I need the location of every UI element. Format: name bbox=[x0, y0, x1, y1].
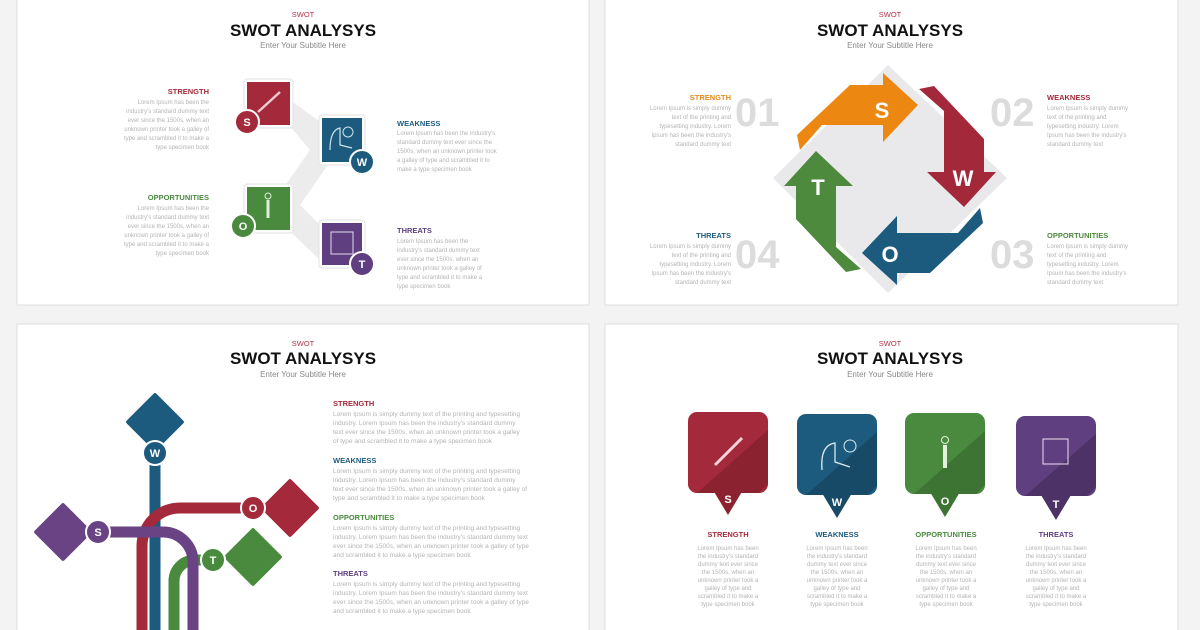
pin texts: the industry's standard bbox=[916, 554, 976, 560]
text: strength: ever since the 1500s, when an bbox=[128, 118, 209, 124]
text: strength: type and scrambled it to make a bbox=[124, 136, 210, 142]
text: strength 2: Lorem Ipsum is simply dummy bbox=[650, 106, 731, 112]
marker W: W bbox=[150, 448, 161, 460]
connector band bbox=[268, 100, 345, 260]
pin texts: Lorem Ipsum has been bbox=[806, 546, 868, 552]
text: weakness: 1500s, when an unknown printer took bbox=[397, 149, 498, 155]
text: strength: STRENGTH bbox=[168, 87, 209, 96]
pin texts: OPPORTUNITIES bbox=[915, 530, 977, 539]
text: weakness: Lorem Ipsum has been the industry's bbox=[397, 131, 495, 137]
numbers bbox=[735, 91, 1034, 277]
text list slide 3: industry. Lorem Ipsum has been the industry's standard dummy bbox=[333, 477, 516, 484]
text: threats bbox=[397, 226, 483, 290]
pin texts: galley of type and bbox=[704, 586, 752, 592]
pin T: T bbox=[1053, 499, 1060, 511]
heading slide 1 bbox=[230, 10, 376, 50]
text: opportunities: OPPORTUNITIES bbox=[148, 193, 209, 202]
text: threats 2: THREATS bbox=[696, 231, 731, 240]
pin texts: the 1500s, when an bbox=[920, 570, 972, 576]
text: threats: THREATS bbox=[397, 226, 432, 235]
text list slide 3: STRENGTH bbox=[333, 399, 374, 408]
heading slide 1: Enter Your Subtitle Here bbox=[260, 41, 346, 50]
icon box O bbox=[231, 184, 293, 238]
icon box W: W bbox=[357, 157, 368, 169]
text: opportunities 2: typesetting industry. Lorem bbox=[1047, 262, 1119, 268]
text: weakness: make a type specimen book bbox=[397, 167, 473, 173]
pin texts: THREATS bbox=[1039, 530, 1073, 539]
pin texts: scrambled it to make a bbox=[916, 594, 977, 600]
numbers: 02 bbox=[990, 91, 1034, 135]
text: opportunities: type and scrambled it to make a bbox=[124, 242, 210, 248]
pin W: W bbox=[832, 497, 843, 509]
arrow O bbox=[862, 208, 983, 285]
heading slide 3: SWOT bbox=[292, 339, 315, 348]
text list slide 3: THREATS bbox=[333, 569, 368, 578]
text: strength 2: Ipsum has been the industry's bbox=[651, 133, 731, 139]
road lines bbox=[98, 450, 253, 630]
text: weakness: WEAKNESS bbox=[397, 119, 440, 128]
heading slide 3: SWOT ANALYSYS bbox=[230, 349, 376, 368]
gray diamond bbox=[773, 65, 1007, 293]
text list slide 3: of type and scrambled it to make a type specimen book bbox=[333, 438, 493, 445]
heading slide 1: SWOT bbox=[292, 10, 315, 19]
text: opportunities: industry's standard dummy text bbox=[126, 215, 209, 221]
pin texts: the 1500s, when an bbox=[811, 570, 863, 576]
pin texts: scrambled it to make a bbox=[807, 594, 868, 600]
marker W bbox=[124, 391, 186, 465]
text: threats: Lorem Ipsum has been the bbox=[397, 239, 469, 245]
heading slide 4: SWOT bbox=[879, 339, 902, 348]
text: strength: industry's standard dummy text bbox=[126, 109, 209, 115]
text: weakness 2: WEAKNESS bbox=[1047, 93, 1090, 102]
pin texts: the 1500s, when an bbox=[702, 570, 754, 576]
marker S: S bbox=[94, 527, 102, 539]
text list slide 3: type and scrambled it to make a type specimen book bbox=[333, 495, 485, 502]
heading slide 4: Enter Your Subtitle Here bbox=[847, 370, 933, 379]
text: threats 2: typesetting industry. Lorem bbox=[659, 262, 731, 268]
text list slide 3: industry. Lorem Ipsum has been the industry's standard dummy text bbox=[333, 534, 528, 541]
text: strength: unknown printer took a galley of bbox=[124, 127, 209, 133]
text list slide 3: Lorem Ipsum is simply dummy text of the printing and typesetting bbox=[333, 468, 521, 475]
pin W bbox=[797, 414, 877, 518]
pin texts: scrambled it to make a bbox=[698, 594, 759, 600]
arrow O: O bbox=[881, 242, 899, 267]
icon box T bbox=[319, 220, 374, 276]
text: strength 2: standard dummy text bbox=[675, 142, 731, 148]
pin texts: STRENGTH bbox=[707, 530, 749, 539]
marker O: O bbox=[249, 503, 258, 515]
arrow T bbox=[784, 151, 861, 272]
pin texts: Lorem Ipsum has been bbox=[1025, 546, 1087, 552]
text: threats: industry's standard dummy text bbox=[397, 248, 480, 254]
text: opportunities 2: Ipsum has been the industry's bbox=[1047, 271, 1127, 277]
pin texts: unknown printer took a bbox=[807, 578, 868, 584]
text list slide 3: text ever since the 1500s, when an unknown printer took a galley of bbox=[333, 486, 527, 493]
text list slide 3: and scrambled it to make a type specimen book bbox=[333, 552, 471, 559]
pin texts: type specimen book bbox=[1029, 602, 1084, 608]
text: weakness 2: standard dummy text bbox=[1047, 142, 1103, 148]
text: threats: type specimen book bbox=[397, 284, 451, 290]
pin texts: Lorem Ipsum has been bbox=[697, 546, 759, 552]
heading slide 2: SWOT ANALYSYS bbox=[817, 21, 963, 40]
pin texts: dummy text ever since bbox=[916, 562, 977, 568]
icon box W bbox=[319, 115, 374, 174]
text: strength 2: text of the printing and bbox=[672, 115, 731, 121]
heading slide 3: Enter Your Subtitle Here bbox=[260, 370, 346, 379]
pin texts: unknown printer took a bbox=[1026, 578, 1087, 584]
heading slide 2: Enter Your Subtitle Here bbox=[847, 41, 933, 50]
text: threats 2: standard dummy text bbox=[675, 280, 731, 286]
text list slide 3: Lorem Ipsum is simply dummy text of the printing and typesetting bbox=[333, 581, 521, 588]
panel: slide 4 pins bbox=[605, 324, 1178, 630]
text: threats: ever since the 1500s, when an bbox=[397, 257, 478, 263]
text: opportunities: unknown printer took a galley of bbox=[124, 233, 209, 239]
text list slide 3: WEAKNESS bbox=[333, 456, 376, 465]
pin texts: the industry's standard bbox=[1026, 554, 1086, 560]
pin texts: dummy text ever since bbox=[807, 562, 868, 568]
pin texts: type specimen book bbox=[919, 602, 974, 608]
text: weakness: standard dummy text ever since the bbox=[397, 140, 493, 146]
text: strength 2 bbox=[650, 93, 731, 148]
marker T bbox=[201, 526, 284, 588]
icon box S: S bbox=[243, 117, 251, 129]
numbers: 03 bbox=[990, 233, 1034, 277]
pin texts: dummy text ever since bbox=[698, 562, 759, 568]
text list slide 3: OPPORTUNITIES bbox=[333, 513, 394, 522]
text: opportunities: ever since the 1500s, when an bbox=[128, 224, 209, 230]
pin S bbox=[688, 412, 768, 515]
text: strength 2: typesetting industry. Lorem bbox=[659, 124, 731, 130]
heading slide 2: SWOT bbox=[879, 10, 902, 19]
text: weakness 2: text of the printing and bbox=[1047, 115, 1106, 121]
heading slide 4 bbox=[817, 339, 963, 379]
pin texts: the industry's standard bbox=[698, 554, 758, 560]
text: opportunities 2: Lorem Ipsum is simply dummy bbox=[1047, 244, 1128, 250]
text: threats 2: text of the printing and bbox=[672, 253, 731, 259]
text list slide 3: and scrambled it to make a type specimen book bbox=[333, 608, 471, 615]
pin O: O bbox=[941, 496, 950, 508]
text: threats 2: Lorem Ipsum is simply dummy bbox=[650, 244, 731, 250]
text: threats 2: Ipsum has been the industry's bbox=[651, 271, 731, 277]
text: opportunities: type specimen book bbox=[156, 251, 210, 257]
heading slide 1: SWOT ANALYSYS bbox=[230, 21, 376, 40]
heading slide 2 bbox=[817, 10, 963, 50]
text: strength 2: STRENGTH bbox=[690, 93, 731, 102]
text: weakness bbox=[397, 119, 498, 173]
text: opportunities 2: standard dummy text bbox=[1047, 280, 1103, 286]
pin texts: scrambled it to make a bbox=[1026, 594, 1087, 600]
icon box S bbox=[235, 79, 293, 134]
text list slide 3: ever since the 1500s, when an unknown printer took a galley of type bbox=[333, 599, 529, 606]
text: weakness 2: Ipsum has been the industry's bbox=[1047, 133, 1127, 139]
pin S: S bbox=[724, 494, 732, 506]
text: opportunities 2: OPPORTUNITIES bbox=[1047, 231, 1108, 240]
text: threats: unknown printer took a galley of bbox=[397, 266, 482, 272]
pin texts: Lorem Ipsum has been bbox=[915, 546, 977, 552]
text list slide 3 bbox=[333, 399, 529, 615]
pin texts: dummy text ever since bbox=[1026, 562, 1087, 568]
arrow S: S bbox=[875, 98, 889, 123]
text: opportunities 2: text of the printing and bbox=[1047, 253, 1106, 259]
marker S bbox=[32, 501, 110, 563]
pin texts: galley of type and bbox=[813, 586, 861, 592]
arrow W: W bbox=[953, 166, 974, 191]
text list slide 3: industry. Lorem Ipsum has been the industry's standard dummy bbox=[333, 420, 516, 427]
text: threats 2 bbox=[650, 231, 731, 286]
panel: slide 1 zigzag bbox=[17, 0, 589, 305]
pin texts: galley of type and bbox=[1032, 586, 1080, 592]
text list slide 3: text ever since the 1500s, when an unknown printer took a galley bbox=[333, 429, 521, 436]
text: opportunities bbox=[124, 193, 210, 257]
pin texts: the 1500s, when an bbox=[1030, 570, 1082, 576]
text: weakness 2 bbox=[1047, 93, 1128, 148]
marker O bbox=[241, 477, 321, 539]
text list slide 3: industry. Lorem Ipsum has been the industry's standard dummy text bbox=[333, 590, 528, 597]
text: opportunities 2 bbox=[1047, 231, 1128, 286]
heading slide 3 bbox=[230, 339, 376, 379]
arrow T: T bbox=[811, 175, 825, 200]
pin texts: unknown printer took a bbox=[698, 578, 759, 584]
pin texts: unknown printer took a bbox=[916, 578, 977, 584]
pin texts: galley of type and bbox=[922, 586, 970, 592]
text: weakness 2: Lorem Ipsum is simply dummy bbox=[1047, 106, 1128, 112]
text: strength: type specimen book bbox=[156, 145, 210, 151]
text: opportunities: Lorem Ipsum has been the bbox=[138, 206, 210, 212]
icon box T: T bbox=[359, 259, 366, 271]
text list slide 3: Lorem Ipsum is simply dummy text of the printing and typesetting bbox=[333, 525, 521, 532]
panel: slide 3 roads bbox=[17, 324, 589, 630]
pin texts: type specimen book bbox=[810, 602, 865, 608]
text list slide 3: Lorem Ipsum is simply dummy text of the printing and typesetting bbox=[333, 411, 521, 418]
numbers: 01 bbox=[735, 91, 780, 135]
text: threats: type and scrambled it to make a bbox=[397, 275, 483, 281]
heading slide 4: SWOT ANALYSYS bbox=[817, 349, 963, 368]
text list slide 3: ever since the 1500s, when an unknown printer took a galley of type bbox=[333, 543, 529, 550]
pin T bbox=[1016, 416, 1096, 520]
pin texts: WEAKNESS bbox=[815, 530, 859, 539]
panel: slide 2 cycle bbox=[605, 0, 1178, 305]
pin texts: type specimen book bbox=[701, 602, 756, 608]
pin texts: the industry's standard bbox=[807, 554, 867, 560]
text: weakness 2: typesetting industry. Lorem bbox=[1047, 124, 1119, 130]
pin O bbox=[905, 413, 985, 517]
text: strength bbox=[124, 87, 210, 151]
arrow S bbox=[797, 73, 918, 150]
icon box O: O bbox=[239, 221, 248, 233]
text: strength: Lorem Ipsum has been the bbox=[138, 100, 210, 106]
arrow W bbox=[919, 86, 996, 207]
text: weakness: a galley of type and scrambled it to bbox=[397, 158, 490, 164]
pin texts bbox=[697, 530, 1087, 608]
marker T: T bbox=[210, 555, 217, 567]
numbers: 04 bbox=[735, 233, 780, 277]
